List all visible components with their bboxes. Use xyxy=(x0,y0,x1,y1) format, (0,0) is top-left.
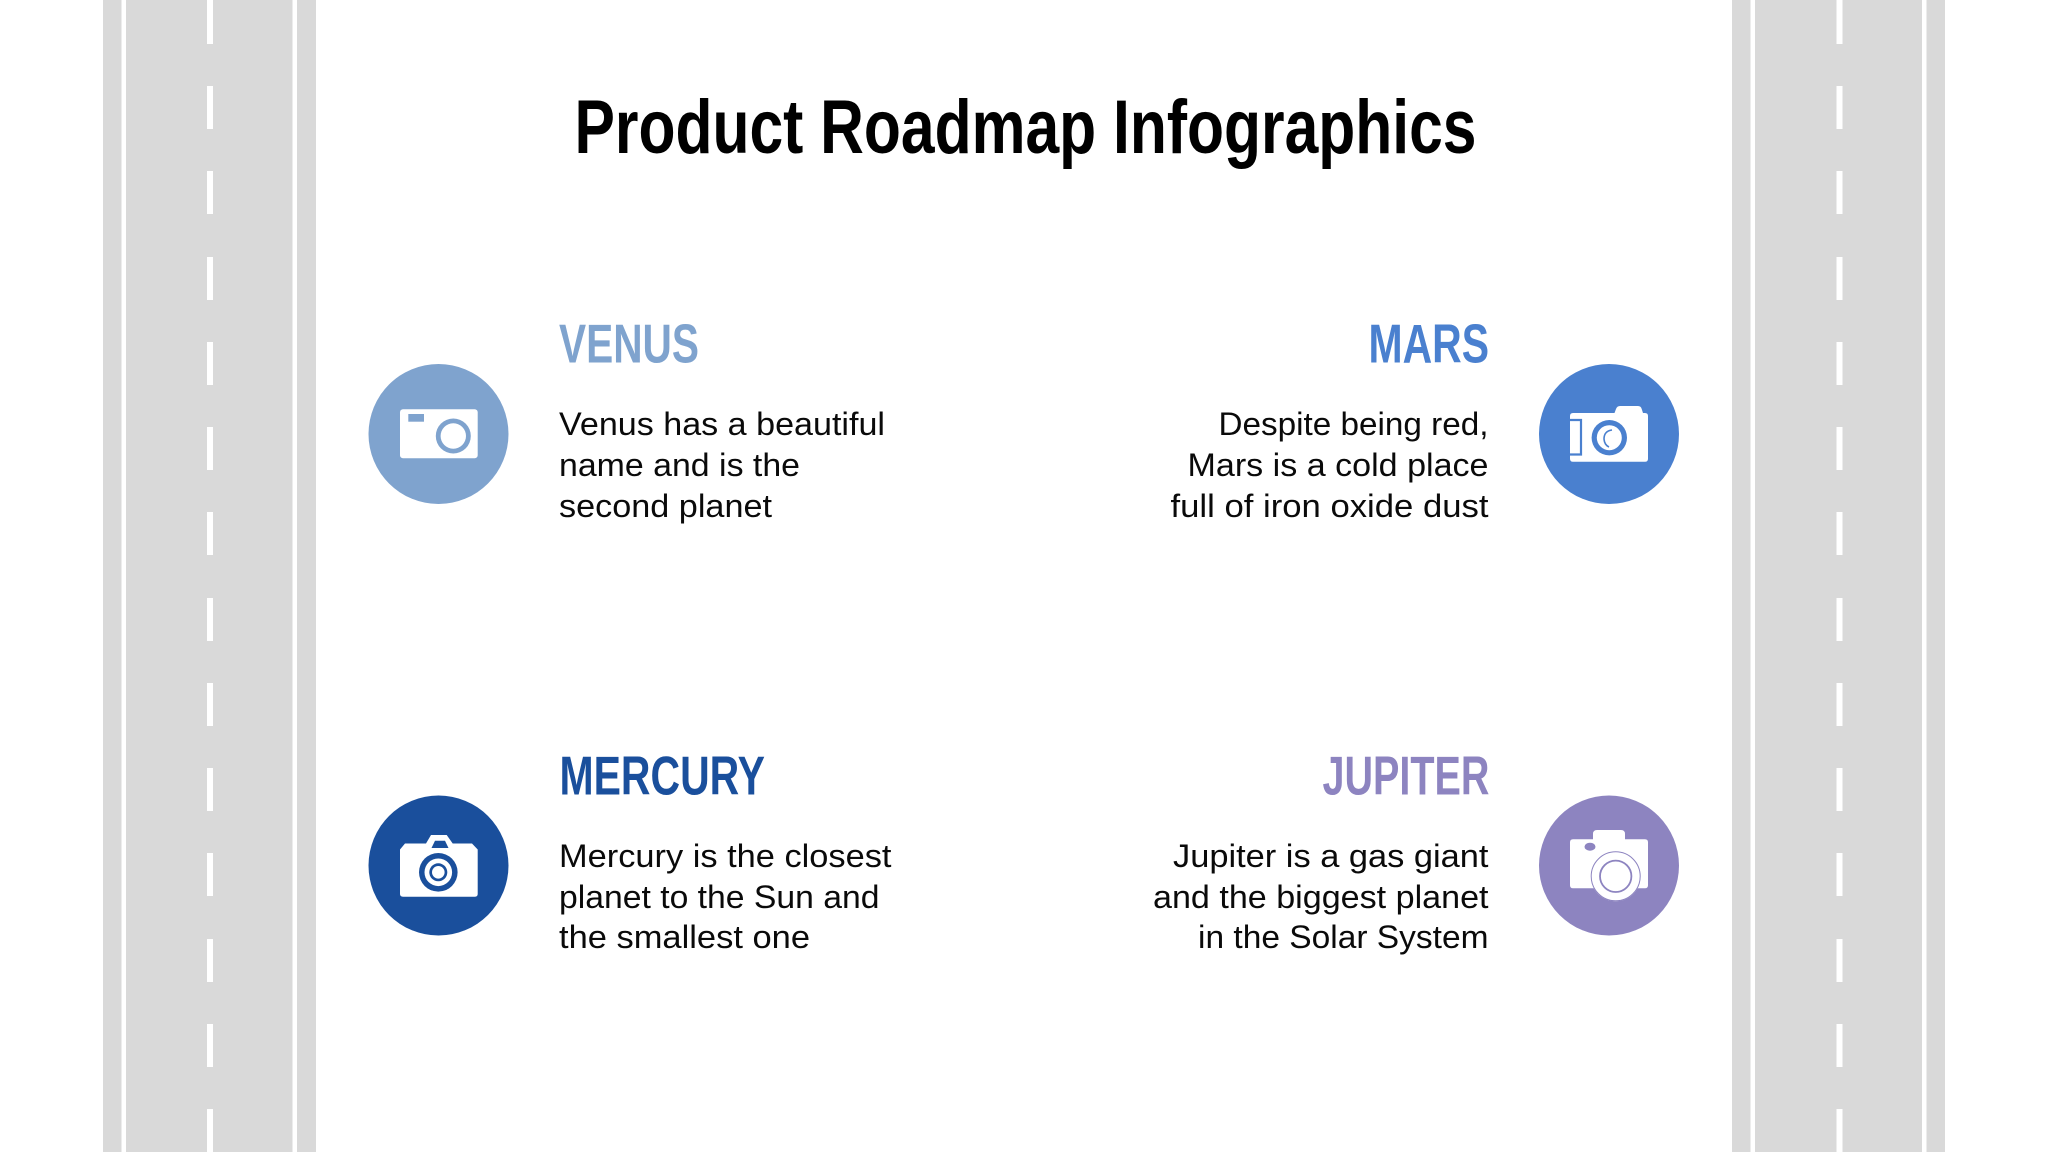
panel: jupiter xyxy=(1153,746,1679,955)
title: Product Roadmap Infographics xyxy=(574,85,1476,170)
description: mars: Mars is a cold place xyxy=(1188,447,1488,483)
panel: venus xyxy=(368,314,885,524)
panel: mercury xyxy=(368,746,892,955)
icon: mercury camera xyxy=(368,796,508,936)
description: venus: Venus has a beautiful xyxy=(559,406,885,442)
icon: jupiter camera xyxy=(1539,796,1679,936)
description: mars: full of iron oxide dust xyxy=(1170,488,1488,524)
description: jupiter: and the biggest planet xyxy=(1153,879,1488,915)
left road xyxy=(103,0,316,1152)
description: mercury: Mercury is the closest xyxy=(559,838,892,874)
description: mars xyxy=(1170,406,1488,524)
description: jupiter: Jupiter is a gas giant xyxy=(1173,838,1488,874)
icon: mars camera xyxy=(1539,364,1679,504)
icon: venus camera xyxy=(368,364,508,504)
description: venus: second planet xyxy=(559,488,772,524)
description: mercury: planet to the Sun and xyxy=(559,879,880,915)
description: mars: Despite being red, xyxy=(1218,406,1488,442)
description: mercury: the smallest one xyxy=(559,919,810,955)
right road xyxy=(1732,0,1945,1152)
heading: venus: VENUS xyxy=(559,314,699,374)
description: jupiter: in the Solar System xyxy=(1198,919,1488,955)
description: venus: name and is the xyxy=(559,447,800,483)
heading: jupiter: JUPITER xyxy=(1322,746,1490,806)
heading: mars: MARS xyxy=(1368,314,1489,374)
description: mercury xyxy=(559,838,892,955)
description: venus xyxy=(559,406,885,524)
description: jupiter xyxy=(1153,838,1488,955)
panel: mars xyxy=(1170,314,1679,524)
heading: mercury: MERCURY xyxy=(560,746,765,806)
